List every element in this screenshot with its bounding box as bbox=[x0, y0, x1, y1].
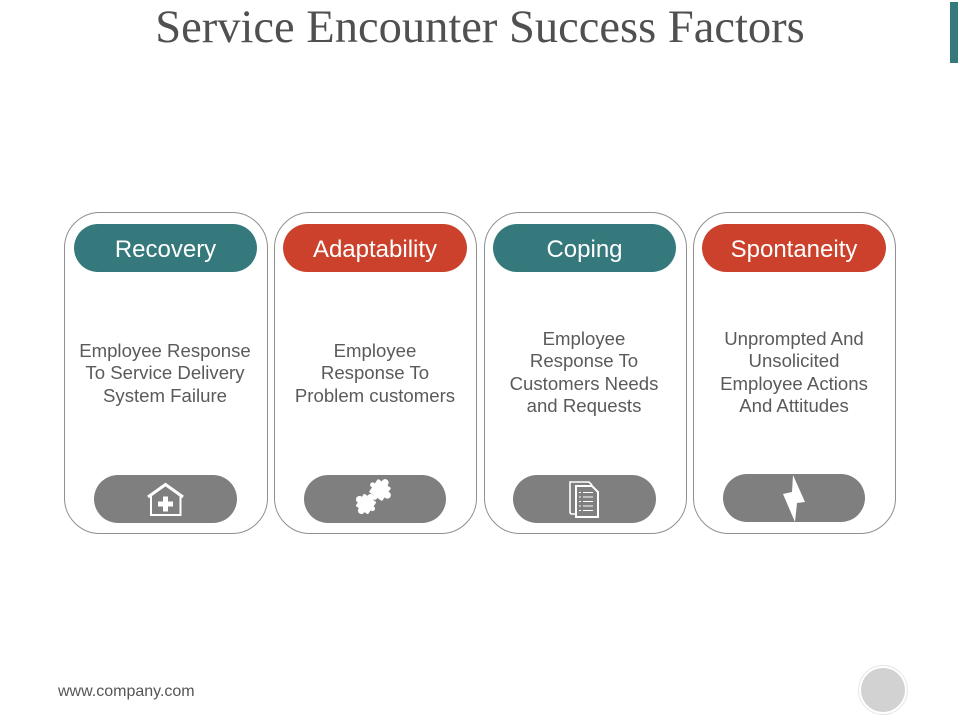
text: coping description: Employee bbox=[543, 328, 625, 349]
panel: coping card bbox=[484, 212, 687, 534]
text: adaptability description: Employee bbox=[334, 340, 416, 361]
text: adaptability description: Problem customers bbox=[295, 385, 455, 406]
title: Service Encounter Success Factors bbox=[155, 2, 805, 53]
heading: recovery: Recovery bbox=[115, 236, 216, 263]
text: spontaneity description: Unprompted And bbox=[724, 328, 864, 349]
heading: spontaneity bbox=[702, 224, 886, 272]
text: coping description: Response To bbox=[530, 350, 638, 371]
icon: lightning bolt bbox=[783, 475, 805, 522]
text: recovery description: System Failure bbox=[103, 385, 227, 406]
heading: adaptability bbox=[283, 224, 467, 272]
panel: spontaneity card bbox=[693, 212, 896, 534]
heading: recovery bbox=[74, 224, 257, 272]
corner accent bar bbox=[950, 2, 958, 63]
heading: adaptability: Adaptability bbox=[313, 236, 437, 263]
text: recovery description: To Service Delivery bbox=[85, 362, 245, 383]
text: spontaneity description: And Attitudes bbox=[739, 395, 849, 416]
icon: puzzle pieces bbox=[356, 479, 391, 514]
text: coping description bbox=[510, 328, 658, 416]
button: coping icon pill bbox=[513, 475, 656, 523]
heading: coping: Coping bbox=[546, 236, 623, 263]
text: recovery description bbox=[79, 340, 251, 406]
icon: hospital house bbox=[147, 482, 184, 516]
button: adaptability icon pill bbox=[304, 475, 446, 523]
text: adaptability description: Response To bbox=[321, 362, 429, 383]
page number circle bbox=[858, 665, 908, 715]
text: spontaneity description bbox=[720, 328, 868, 416]
footer url: www.company.com bbox=[58, 683, 195, 700]
text: coping description: and Requests bbox=[527, 395, 641, 416]
button: recovery icon pill bbox=[94, 475, 237, 523]
text: adaptability description bbox=[295, 340, 455, 406]
button: spontaneity icon pill bbox=[723, 474, 865, 522]
icon: documents bbox=[569, 481, 599, 518]
text: coping description: Customers Needs bbox=[510, 373, 658, 394]
text: recovery description: Employee Response bbox=[79, 340, 251, 361]
heading: coping bbox=[493, 224, 676, 272]
text: spontaneity description: Employee Actions bbox=[720, 373, 868, 394]
panel: recovery card bbox=[64, 212, 268, 534]
panel: adaptability card bbox=[274, 212, 477, 534]
text: spontaneity description: Unsolicited bbox=[749, 350, 839, 371]
heading: spontaneity: Spontaneity bbox=[731, 236, 857, 263]
